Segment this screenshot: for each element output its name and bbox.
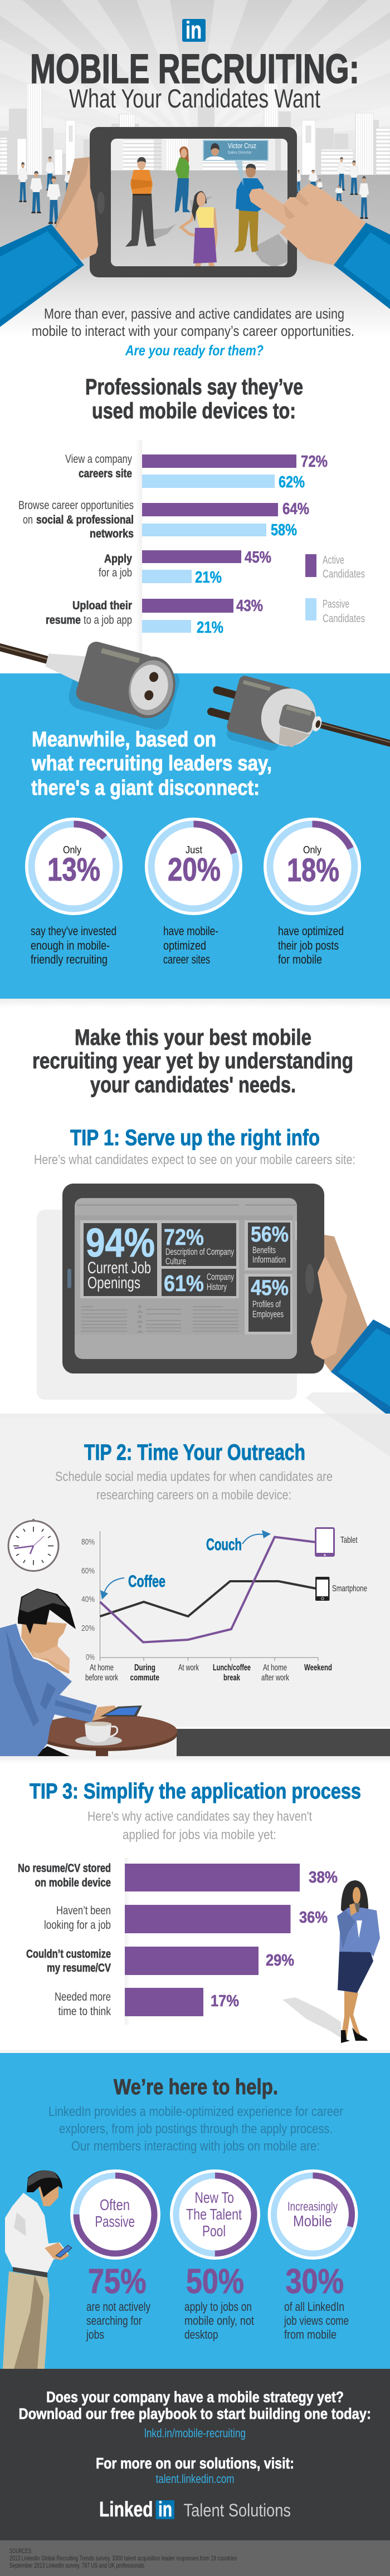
profile card: Victor Cruz: [203, 140, 268, 187]
heading: make this your best: [32, 1025, 353, 1097]
caption: 20%: career sites: [163, 952, 210, 966]
bar: no resume stored: on mobile device: [35, 1876, 111, 1889]
stat circle: 13%: 13%: [47, 852, 100, 888]
stat circle: new to the talent pool: Pool: [202, 2222, 226, 2240]
stat circle: new to the talent pool: The Talent: [186, 2206, 242, 2223]
stat circle: 18%: Only: [303, 844, 321, 856]
stat circle: 20%: Just: [186, 844, 202, 856]
stat: 30%: job views come: [284, 2314, 349, 2328]
y axis labels: [81, 1537, 95, 1662]
panel: tip 1: [34, 1126, 390, 1456]
bar: not looking: 36%: [299, 1909, 328, 1927]
caption: 13%: friendly recruiting: [31, 952, 108, 966]
left hand and sleeve: [0, 157, 98, 327]
man in blue sweater: [234, 164, 264, 252]
row: upload resume: 43%: [236, 597, 263, 615]
panel: here to help: [0, 2050, 390, 2369]
illustration: man with phone: [3, 2171, 72, 2369]
stat: 45%: [245, 1274, 292, 1335]
stat: 30%: of all LinkedIn: [284, 2300, 344, 2314]
footer heading: [19, 2388, 371, 2422]
bar chart: mobile device uses: [18, 440, 365, 663]
caption: 18%: for mobile: [278, 952, 322, 966]
logo: LinkedIn Talent Solutions: Linked: [99, 2498, 153, 2521]
logo: LinkedIn Talent Solutions: [99, 2498, 291, 2521]
legend: Active: [323, 554, 344, 566]
row: browse career opportunities: social & professional: [36, 514, 134, 526]
panel: footer call to action: [0, 2369, 390, 2540]
panel: tip 2: [0, 1414, 390, 1756]
heading: here to help: We’re here to help.: [114, 2075, 278, 2099]
x axis labels: break: [223, 1673, 240, 1683]
stat: 45%: Profiles of: [252, 1299, 281, 1309]
caption: 18%: have optimized: [278, 924, 344, 938]
stat: 50%: mobile only, not: [184, 2314, 254, 2328]
x axis labels: after work: [261, 1673, 290, 1683]
legend: [305, 554, 365, 625]
stat: 45%: 45%: [251, 1276, 289, 1300]
heading: professionals: Professionals say they’ve: [85, 375, 303, 399]
face and hand: [21, 1620, 70, 1674]
heading: make this your best: Make this your best mobile: [75, 1025, 311, 1050]
stat: 30%: from mobile: [284, 2328, 337, 2342]
stat: 75%: are not actively: [86, 2300, 150, 2314]
tip 2 heading: TIP 2: Time Your Outreach: [84, 1440, 305, 1465]
tip 1 heading: [34, 1126, 355, 1167]
illustration: man at cafe table: [0, 1588, 177, 1756]
bar: not looking: Haven’t been: [56, 1904, 111, 1917]
x axis labels: before work: [85, 1673, 119, 1683]
row: upload resume: 21%: [197, 619, 223, 637]
tip 2 heading: [55, 1440, 333, 1503]
tablet side button: [97, 192, 105, 214]
panel: hero header: [0, 0, 390, 336]
caption: 13%: [31, 924, 116, 966]
stat: 75%: searching for: [86, 2314, 142, 2328]
legend: Candidates: [323, 568, 365, 580]
stat circle: new to the talent pool: [170, 2169, 260, 2260]
device: [100, 1705, 142, 1717]
row: apply for a job: Apply: [104, 553, 132, 565]
coffee cup: [75, 1722, 122, 1746]
row: upload resume: to a job app: [84, 614, 132, 627]
caption: 18%: [278, 924, 344, 966]
bar: customize resume: [26, 1947, 294, 1975]
panel: sources: SOURCES:: [9, 2547, 32, 2555]
x axis labels: commute: [130, 1673, 159, 1683]
shirt: [0, 1624, 97, 1756]
row: browse career opportunities: Browse career opportunities: [18, 499, 134, 512]
x axis labels: At home: [90, 1663, 114, 1673]
caption: 20%: [163, 924, 218, 966]
stat: 50%: apply to jobs on: [184, 2300, 252, 2314]
row: browse career opportunities: on: [23, 514, 33, 526]
stat: 94%: [84, 1221, 157, 1296]
hair: [18, 1588, 76, 1634]
tablet body: [90, 127, 297, 277]
heading: professionals: used mobile devices to:: [92, 399, 296, 423]
stat circle: often passive: Often: [100, 2196, 130, 2213]
y axis labels: 20%: [81, 1624, 95, 1633]
callout: coffee: Coffee: [128, 1572, 165, 1591]
caption: 20%: have mobile-: [163, 924, 218, 938]
intro text: Are you ready for them?: [125, 342, 264, 359]
tip 2 heading: researching careers on a mobile device:: [96, 1488, 291, 1503]
stat: 61%: [162, 1269, 236, 1296]
stat circle: 13%: [25, 818, 123, 915]
stat: 56%: [245, 1220, 292, 1270]
tablet in hands: [0, 127, 390, 327]
intro text: [32, 305, 354, 359]
illustration: businesswoman on phone: [282, 1880, 380, 2043]
stat circle: often passive: [70, 2169, 160, 2260]
x axis labels: During: [134, 1663, 155, 1673]
stat: 94%: Current Job: [87, 1259, 151, 1277]
stat: 61%: Company: [207, 1272, 234, 1282]
caption: 13%: enough in mobile-: [31, 938, 110, 952]
stat circle: increasingly mobile: Increasingly: [287, 2199, 338, 2213]
stat circle: 13%: Only: [63, 844, 81, 856]
row: view careers site: 72%: [301, 453, 328, 471]
stat circle: 20%: 20%: [168, 852, 221, 888]
heading: disconnect: there's a giant disconnect:: [31, 776, 260, 800]
stat: 94%: 94%: [86, 1221, 155, 1265]
heading: here to help: explorers, from job postings through the apply process.: [59, 2122, 333, 2137]
tip 3 heading: applied for jobs via mobile yet:: [123, 1827, 276, 1842]
tablet with stats: [62, 1184, 324, 1373]
row: view careers site: 62%: [279, 473, 305, 491]
hand holding device: [92, 1705, 120, 1721]
solutions link: talent.linkedin.com: [156, 2472, 234, 2486]
icon: smartphone: [315, 1577, 367, 1601]
row: browse career opportunities: 58%: [271, 521, 297, 539]
caption: 20%: optimized: [163, 938, 206, 952]
callout: couch: [206, 1530, 271, 1554]
stat: 75%: [86, 2262, 150, 2342]
heading: professionals: [85, 375, 303, 423]
solutions line: For more on our solutions, visit:: [96, 2455, 294, 2472]
caption: 18%: their job posts: [278, 938, 339, 952]
bar: time to think: Needed more: [55, 1991, 111, 2003]
heading: here to help: Our members interacting with jobs on mobile are:: [71, 2139, 320, 2154]
playbook link: lnkd.in/mobile-recruiting: [144, 2426, 246, 2440]
tip 2 heading: Schedule social media updates for when candidates are: [55, 1469, 333, 1484]
bar: not looking: looking for a job: [44, 1919, 111, 1932]
row: view careers site: View a company: [65, 453, 132, 466]
woman in green top: [175, 146, 191, 213]
bar: customize resume: my resume/CV: [47, 1962, 111, 1974]
row: apply for a job: [99, 549, 271, 586]
panel: tip 3: [18, 1780, 380, 2043]
row: upload resume: [46, 597, 263, 637]
tip 1 heading: TIP 1: Serve up the right info: [70, 1126, 320, 1150]
stat circle: 18%: 18%: [287, 852, 339, 888]
stat circle: increasingly mobile: Mobile: [293, 2212, 332, 2230]
y axis labels: 40%: [81, 1595, 95, 1604]
stat: 72%: 72%: [164, 1224, 204, 1250]
heading: disconnect: [31, 728, 272, 800]
stat: 50%: desktop: [184, 2328, 218, 2342]
stat: 72%: [162, 1223, 236, 1267]
row: browse career opportunities: 64%: [282, 500, 309, 518]
stat: 56%: 56%: [251, 1223, 289, 1247]
stat: 30%: [284, 2262, 349, 2342]
heading: here to help: [48, 2075, 343, 2154]
woman in purple skirt: [181, 191, 217, 266]
line: smartphone: [100, 1581, 316, 1616]
icon: socket plug: [0, 642, 179, 730]
row: apply for a job: for a job: [99, 566, 132, 579]
bar: customize resume: Couldn’t customize: [26, 1948, 111, 1961]
x axis labels: At home: [263, 1663, 287, 1673]
y axis labels: 0%: [86, 1653, 95, 1662]
stat: 75%: jobs: [86, 2328, 104, 2342]
legend: Candidates: [323, 613, 365, 625]
line chart: research time: [81, 1528, 367, 1683]
stat: 75%: 75%: [88, 2262, 146, 2301]
icon: clock: [8, 1519, 58, 1571]
stat circle: increasingly mobile: [267, 2169, 358, 2260]
thumb and sleeve: [311, 1256, 390, 1417]
x axis labels: Lunch/coffee: [213, 1663, 251, 1673]
stat circle: 20%: [145, 818, 242, 915]
x axis labels: At work: [178, 1663, 199, 1673]
profile card: Victor Cruz: Victor Cruz: [228, 141, 256, 150]
icon: tablet: [315, 1528, 358, 1556]
bar: time to think: time to think: [58, 2005, 111, 2018]
stat: 50%: [184, 2262, 254, 2342]
bar: no resume stored: 38%: [309, 1869, 338, 1886]
tip 3 heading: [30, 1780, 361, 1842]
callout: couch: Couch: [206, 1536, 242, 1554]
stat circle: 18%: [264, 818, 361, 915]
bar: no resume stored: [18, 1862, 338, 1891]
logo: LinkedIn Talent Solutions: Talent Solutions: [184, 2500, 291, 2520]
profile card: Victor Cruz: Sales Director: [227, 150, 252, 155]
icon: smartphone: Smartphone: [332, 1584, 367, 1593]
right hand and sleeve: [249, 183, 390, 309]
x axis labels: Weekend: [304, 1663, 332, 1673]
icon: tablet: Tablet: [340, 1536, 358, 1545]
heading: disconnect: what recruiting leaders say,: [31, 752, 272, 775]
panel: sources: 2013 LinkedIn Global Recruiting Trends survey, 3300 talent acquisition leader responses from 19 countries: [9, 2554, 237, 2562]
row: upload resume: resume: [46, 614, 81, 627]
stat circle: often passive: Passive: [95, 2213, 135, 2230]
bar: time to think: 17%: [211, 1992, 239, 2010]
row: upload resume: Upload their: [72, 599, 132, 612]
panel: sources: September 2013 LinkedIn survey, 787 US and UK professionals: [9, 2562, 144, 2569]
heading: disconnect: Meanwhile, based on: [32, 728, 216, 751]
title: What Your Candidates Want: [69, 84, 320, 113]
logo: LinkedIn: in: [186, 17, 202, 44]
stat: 72%: Culture: [165, 1256, 186, 1267]
tip 3 heading: Here's why active candidates say they haven't: [87, 1809, 312, 1824]
row: browse career opportunities: networks: [90, 527, 134, 540]
bar: time to think: [55, 1988, 239, 2018]
row: browse career opportunities: [18, 499, 309, 540]
heading: make this your best: your candidates' needs.: [90, 1073, 296, 1097]
stat: 56%: Information: [252, 1254, 286, 1265]
panel: sources: [0, 2540, 390, 2576]
holding hand: [324, 1235, 368, 1372]
callout: coffee: [100, 1572, 165, 1600]
line: tablet: [100, 1537, 315, 1642]
stat: 72%: Description of Company: [165, 1247, 234, 1257]
stat: 50%: 50%: [186, 2262, 244, 2301]
man in orange shirt: [125, 157, 156, 247]
row: view careers site: [65, 453, 328, 491]
stat: 56%: Benefits: [252, 1245, 276, 1255]
stat: 61%: History: [207, 1282, 227, 1292]
icon: plug: [202, 669, 390, 783]
crowd of people: [18, 157, 369, 224]
caption: 13%: say they've invested: [31, 924, 116, 938]
row: apply for a job: 21%: [195, 569, 222, 586]
legend: Passive: [323, 598, 349, 610]
panel: disconnect: [0, 614, 390, 999]
bar: customize resume: 29%: [266, 1952, 294, 1969]
stat: 61%: 61%: [164, 1270, 204, 1296]
row: apply for a job: 45%: [245, 549, 271, 566]
x axis labels: [85, 1663, 332, 1683]
y axis labels: 60%: [81, 1566, 95, 1576]
bar: no resume stored: No resume/CV stored: [18, 1862, 111, 1875]
stat: 30%: 30%: [285, 2262, 344, 2301]
tablet screen with candidates: [111, 139, 287, 267]
row: view careers site: careers site: [79, 467, 132, 480]
stat: 94%: Openings: [87, 1274, 140, 1292]
title: [30, 46, 359, 113]
y axis labels: 80%: [81, 1537, 95, 1547]
stat: 45%: Employees: [252, 1309, 284, 1319]
heading: here to help: LinkedIn provides a mobile-optimized experience for career: [48, 2104, 343, 2119]
logo: LinkedIn Talent Solutions: in: [158, 2498, 172, 2521]
stat circle: new to the talent pool: New To: [195, 2189, 234, 2206]
bar: not looking: [44, 1904, 328, 1933]
table: [32, 1714, 177, 1756]
